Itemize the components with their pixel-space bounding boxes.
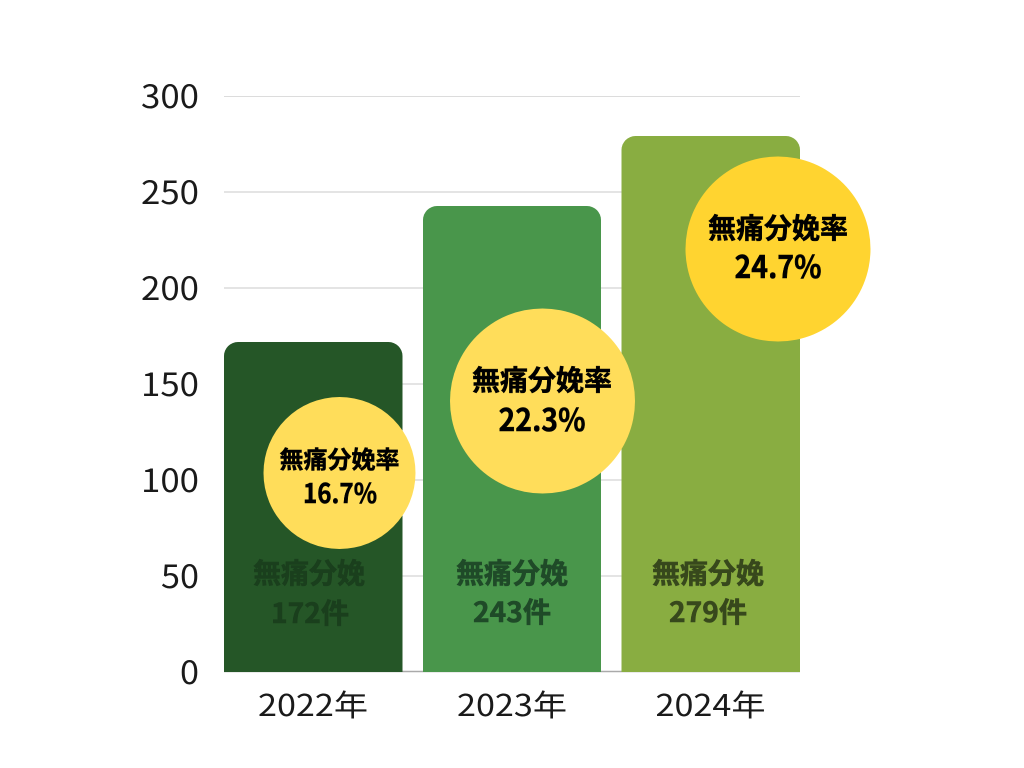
y axis labels: 0 bbox=[180, 648, 199, 694]
bar label: 2022 bbox=[253, 552, 365, 632]
y axis labels bbox=[141, 72, 199, 694]
y axis labels: 100 bbox=[141, 456, 199, 502]
y axis labels: 50 bbox=[161, 552, 199, 598]
bar label: 2022: 無痛分娩 bbox=[253, 552, 365, 592]
callout: 2024 rate bbox=[686, 156, 870, 342]
bar label: 2023: 243件 bbox=[473, 591, 551, 631]
bar label: 2023: 無痛分娩 bbox=[456, 552, 568, 592]
callout: 2022 rate: 16.7% bbox=[303, 472, 377, 511]
bar label: 2024 bbox=[652, 552, 764, 631]
callout: 2024 rate: 24.7% bbox=[734, 242, 822, 287]
bar label: 2024: 279件 bbox=[669, 591, 747, 631]
y axis labels: 200 bbox=[141, 264, 199, 310]
x axis labels bbox=[258, 681, 766, 725]
bar: 2023 bbox=[423, 206, 601, 672]
x axis labels: 2024年 bbox=[656, 681, 766, 725]
y axis labels: 150 bbox=[141, 360, 199, 406]
bar: 2022 bbox=[224, 342, 402, 672]
callout: 2023 rate: 無痛分娩率 bbox=[472, 359, 612, 399]
x axis labels: 2023年 bbox=[457, 681, 567, 725]
callout: 2023 rate: 22.3% bbox=[498, 395, 586, 440]
bar: 2024 bbox=[622, 136, 800, 672]
callout: 2023 rate bbox=[450, 308, 635, 494]
callout: 2024 rate: 無痛分娩率 bbox=[708, 207, 848, 247]
bar label: 2022: 172件 bbox=[271, 592, 349, 632]
callout: 2022 rate bbox=[264, 397, 416, 549]
bar label: 2023 bbox=[456, 552, 568, 631]
x axis labels: 2022年 bbox=[258, 681, 368, 725]
y axis labels: 250 bbox=[141, 168, 199, 214]
bar label: 2024: 無痛分娩 bbox=[652, 552, 764, 592]
y axis labels: 300 bbox=[141, 72, 199, 118]
callout: 2022 rate: 無痛分娩率 bbox=[280, 440, 400, 475]
